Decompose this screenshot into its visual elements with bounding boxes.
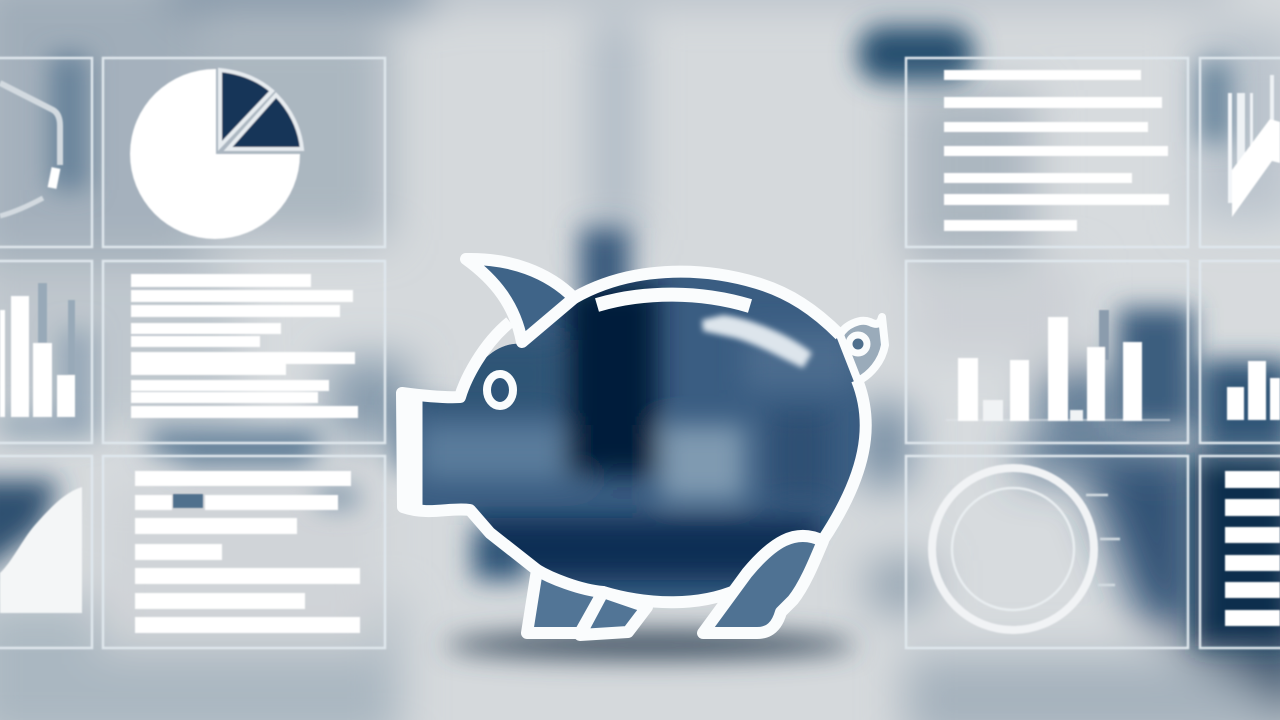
text line bars: [944, 70, 1169, 231]
mixed line and bar chart: [1228, 75, 1280, 217]
panel: right column, middle (bar chart): [1200, 261, 1280, 443]
panel: pie chart: [103, 58, 385, 247]
area chart: [0, 487, 82, 613]
panel: right column, bottom (stripes): [1200, 456, 1280, 648]
panel: right column, top (chart): [1200, 58, 1280, 247]
coin slot: [597, 295, 750, 306]
panel: text lines top right: [906, 58, 1188, 247]
panel: left column, bottom (area chart): [0, 456, 92, 648]
panel: text lines middle left: [103, 261, 385, 443]
bar chart: [0, 283, 75, 417]
piggy bank icon: [395, 259, 895, 650]
panel: left column, middle (bar chart): [0, 261, 92, 443]
pig middle leg: [580, 592, 647, 635]
pig tail: [840, 317, 885, 381]
text line bars: [135, 471, 360, 633]
panel: ring gauge: [906, 456, 1188, 648]
pig back leg: [703, 536, 823, 633]
panel: text lines bottom left: [103, 456, 385, 648]
ring gauge: [932, 468, 1120, 630]
pig body fill: [422, 278, 860, 596]
text line bars: [131, 274, 358, 418]
pig outline: [402, 272, 866, 602]
panel: bar chart right: [906, 261, 1188, 443]
pig eye: [487, 374, 513, 406]
pig ear: [466, 259, 574, 342]
bar chart: [1227, 361, 1280, 420]
panel: left column, top (gauge): [0, 58, 92, 247]
glass highlight: [702, 315, 812, 368]
text line bars: [1225, 471, 1280, 626]
bar chart: [946, 310, 1170, 421]
pig snout line: [406, 398, 422, 508]
pig front leg: [527, 570, 603, 633]
pie chart: [130, 69, 302, 239]
icon: partial ring gauge: [0, 83, 60, 216]
